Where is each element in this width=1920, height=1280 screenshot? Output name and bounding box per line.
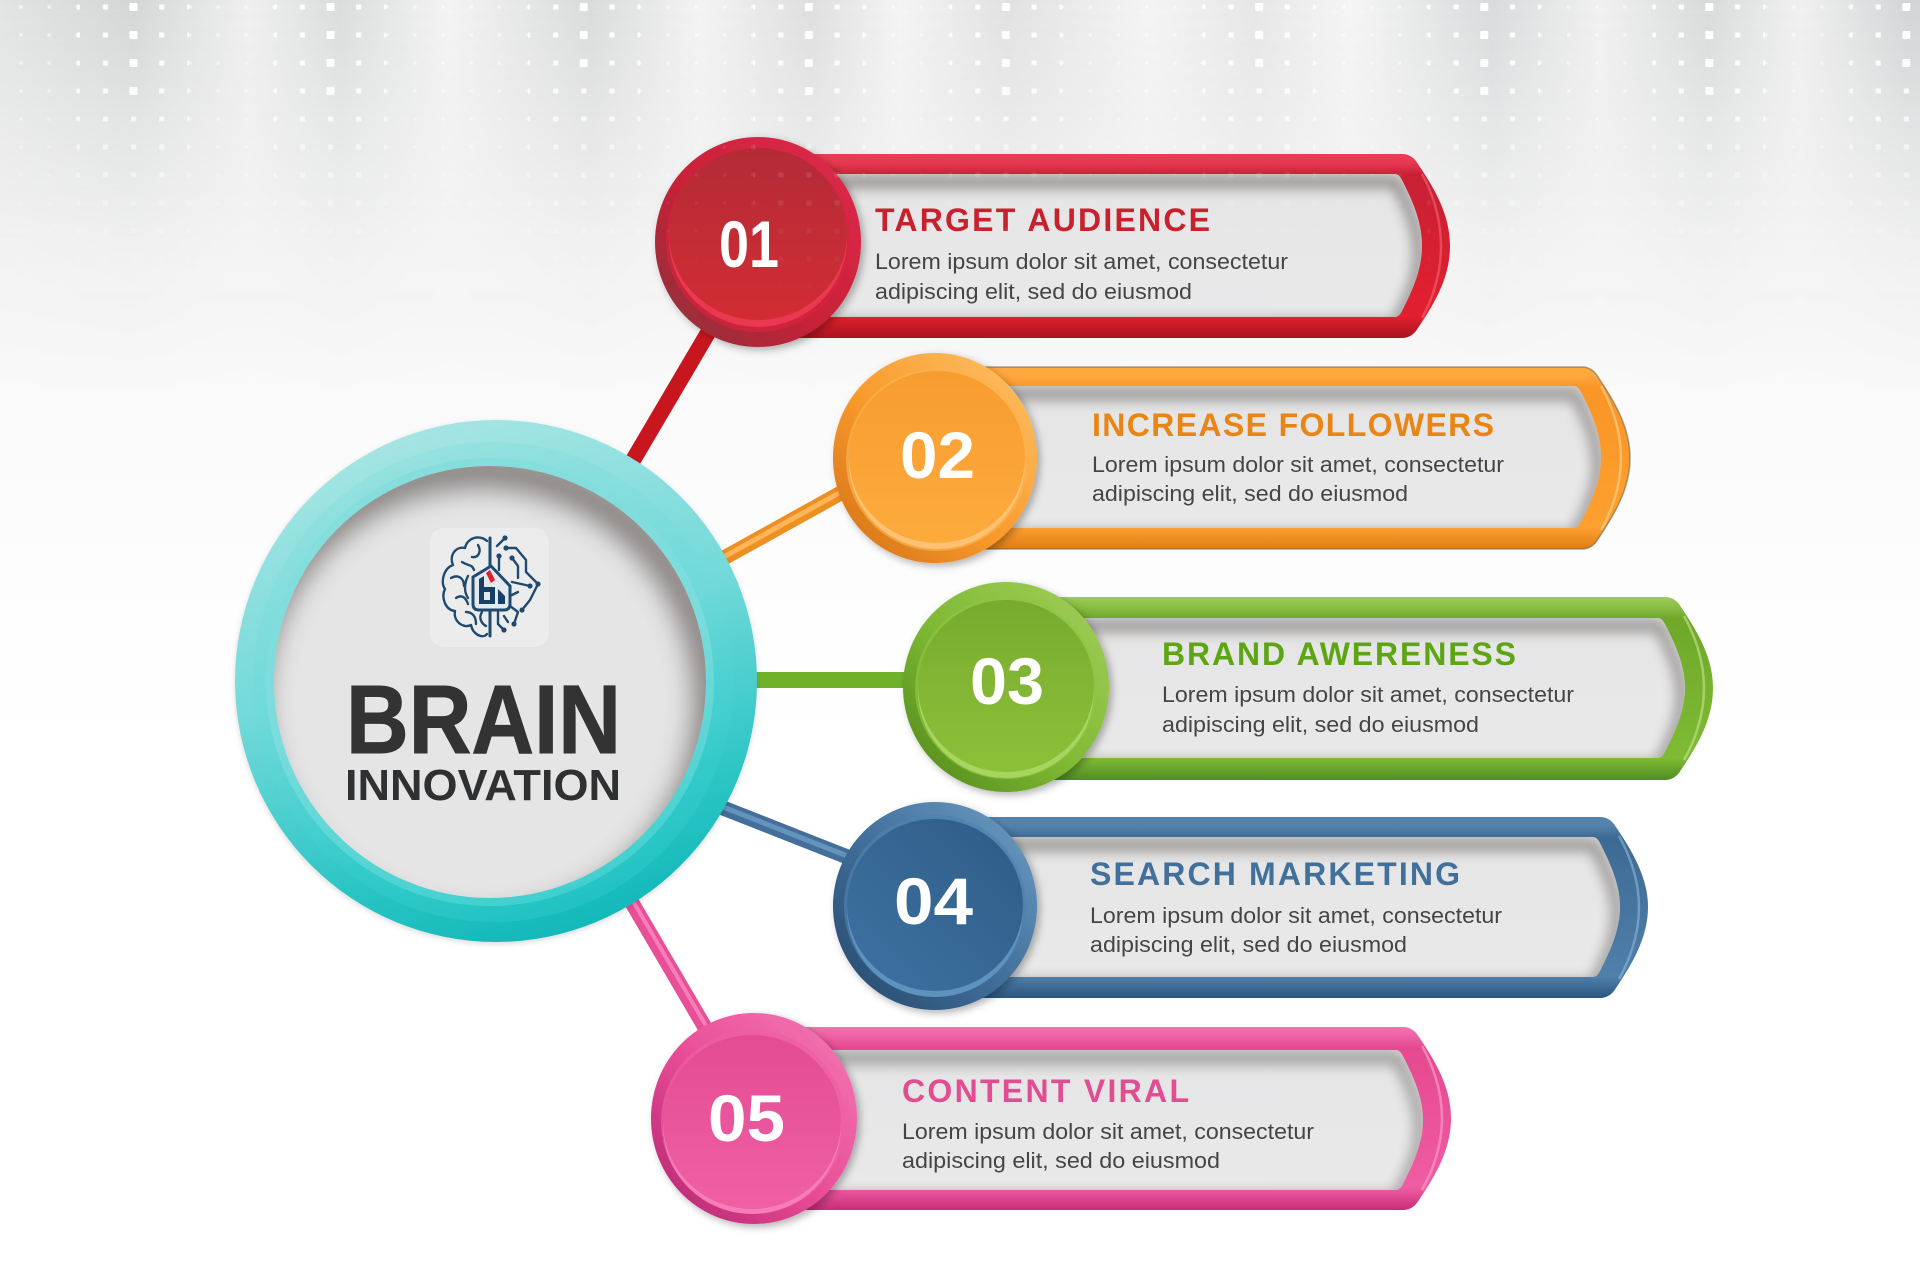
connector: blue line to step 04: [718, 805, 850, 858]
number badge 05: [651, 1013, 857, 1224]
body 02: Lorem ipsum dolor sit amet, consectetur: [1092, 452, 1504, 477]
step 04: Search Marketing: [833, 802, 1648, 1010]
body 03: Lorem ipsum dolor sit amet, consectetur: [1162, 682, 1574, 707]
body 05: [902, 1119, 1314, 1173]
hub title: BRAIN: [346, 665, 621, 774]
body 01: adipiscing elit, sed do eiusmod: [875, 279, 1192, 304]
number badge 02: [833, 353, 1037, 563]
number badge 03: [903, 582, 1109, 792]
body 02: [1092, 452, 1504, 506]
body 04: adipiscing elit, sed do eiusmod: [1090, 932, 1407, 957]
step 02: Increase Followers: [833, 353, 1630, 563]
body 01: [875, 249, 1288, 304]
hub title: INNOVATION: [345, 761, 621, 810]
number badge 04: 04: [894, 864, 973, 938]
connector: pink line to step 05: [628, 896, 712, 1036]
panel frame 04: [932, 817, 1648, 998]
hub ring: [235, 420, 757, 942]
body 01: Lorem ipsum dolor sit amet, consectetur: [875, 249, 1288, 274]
title 05: CONTENT VIRAL: [902, 1073, 1189, 1109]
step 05: Content Viral: [651, 1013, 1451, 1224]
background: silver gradient with vertical streaks: [0, 0, 1920, 363]
connector: red line to step 01: [632, 326, 712, 462]
hub title: [345, 665, 621, 810]
title 04: SEARCH MARKETING: [1090, 856, 1460, 892]
body 04: [1090, 903, 1502, 957]
title 02: INCREASE FOLLOWERS: [1092, 407, 1494, 443]
panel frame 03: [1003, 597, 1713, 780]
connector: orange line to step 02: [722, 488, 848, 559]
central hub: Brain Innovation: [235, 420, 757, 942]
body 03: adipiscing elit, sed do eiusmod: [1162, 712, 1479, 737]
step 01: Target Audience: [655, 137, 1450, 347]
number badge 01: 01: [719, 207, 779, 281]
logo tile with brain icon: [430, 528, 549, 647]
body 05: Lorem ipsum dolor sit amet, consectetur: [902, 1119, 1314, 1144]
body 05: adipiscing elit, sed do eiusmod: [902, 1148, 1220, 1173]
panel frame 02: [932, 367, 1630, 549]
panel frame 01: [755, 154, 1450, 338]
number badge 05: 05: [708, 1081, 785, 1155]
number badge 03: 03: [970, 644, 1044, 718]
number badge 01: [655, 137, 861, 347]
faint dot overlay on step 01: [666, 144, 1430, 234]
connector: green line to step 03: [750, 672, 910, 688]
number badge 04: [833, 802, 1037, 1010]
hub face: [274, 466, 706, 898]
step 03: Brand Awereness: [903, 582, 1713, 792]
number badge 02: 02: [900, 418, 975, 492]
body 04: Lorem ipsum dolor sit amet, consectetur: [1090, 903, 1502, 928]
body 02: adipiscing elit, sed do eiusmod: [1092, 481, 1408, 506]
title 03: BRAND AWERENESS: [1162, 636, 1516, 672]
background: dot grid: [20, 3, 1910, 234]
panel frame 05: [750, 1027, 1451, 1210]
body 03: [1162, 682, 1574, 737]
title 01: TARGET AUDIENCE: [875, 202, 1210, 238]
